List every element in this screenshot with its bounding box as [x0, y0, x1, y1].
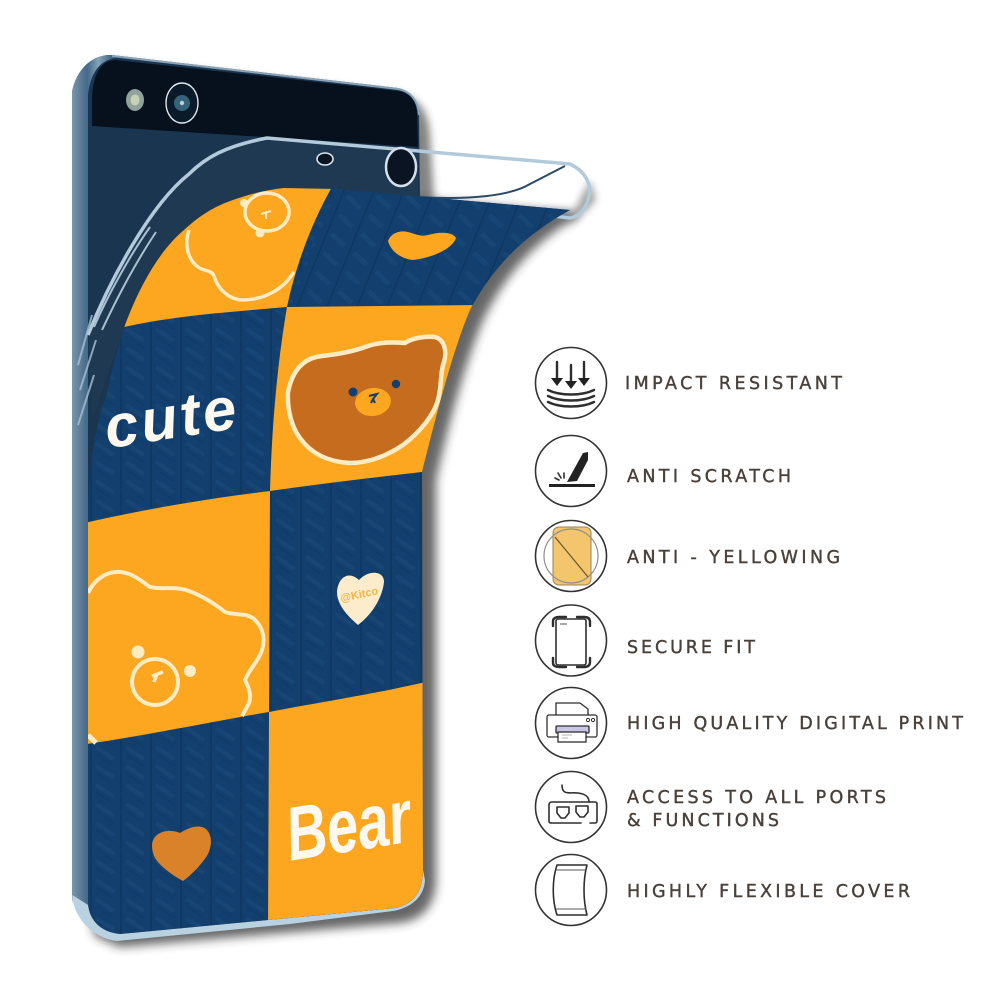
orange bottom right square [268, 681, 430, 930]
label: anti scratch: ANTI SCRATCH [627, 467, 791, 487]
label: ports: & FUNCTIONS [627, 811, 779, 831]
side button [94, 227, 156, 330]
phone metal edge [72, 55, 116, 905]
kitco heart [337, 573, 384, 625]
label: digital print: HIGH QUALITY DIGITAL PRINT [627, 714, 963, 734]
phone glass top band [92, 60, 418, 147]
feature: digital print [536, 688, 963, 758]
bear lettering: Bear [280, 773, 420, 878]
lower bear outline [88, 572, 263, 743]
phone shadow [110, 60, 434, 300]
orange second row square [270, 305, 480, 491]
feature list [536, 348, 963, 926]
feature: secure fit [536, 605, 755, 676]
label: flexible cover: HIGHLY FLEXIBLE COVER [627, 882, 910, 902]
phone camera [166, 83, 198, 123]
bear nose [369, 394, 377, 403]
label: impact resistant: IMPACT RESISTANT [625, 374, 842, 394]
knit top right square [286, 185, 580, 312]
label: secure fit: SECURE FIT [627, 638, 755, 658]
feature: flexible cover [536, 854, 910, 926]
feature: ports [536, 772, 886, 842]
brown bear face [288, 337, 445, 463]
label: anti yellowing: ANTI - YELLOWING [627, 548, 840, 568]
label: ports: ACCESS TO ALL PORTS [627, 788, 886, 808]
feature: anti yellowing [536, 520, 840, 592]
feature: anti scratch [536, 436, 791, 506]
case bottom rim [72, 870, 425, 941]
knit navy base [80, 180, 580, 940]
phone flash [126, 89, 144, 111]
side pleats [78, 315, 96, 425]
bear snout [355, 388, 391, 416]
bear head [288, 337, 445, 463]
printed artwork [80, 180, 580, 940]
icon: yellowing case [536, 520, 606, 592]
phone body [72, 55, 420, 905]
icon: scratch blade [536, 436, 606, 506]
clear case top band [78, 138, 590, 425]
icon: printer [536, 688, 606, 758]
camera cutout [386, 148, 416, 186]
phone back [72, 55, 434, 905]
case drop shadow [88, 188, 578, 947]
label: ports [627, 788, 886, 831]
small orange heart [388, 231, 456, 260]
phone and printed case [72, 55, 596, 947]
case outline right [88, 138, 590, 335]
top bear outline [187, 193, 294, 300]
icon: flexible sheet [536, 854, 606, 926]
band fill [88, 138, 418, 420]
kitco heart: @Kitco [339, 585, 380, 605]
bottom brown heart [152, 827, 211, 881]
orange top left square [124, 188, 331, 327]
tip shadow [420, 180, 596, 222]
small hole [317, 153, 333, 165]
icon: port connector [536, 772, 606, 842]
cute lettering: cute [100, 374, 244, 461]
icon: impact arrows [536, 348, 606, 418]
clear corner inner line [418, 166, 565, 198]
bear eyes [348, 388, 358, 396]
icon: secure phone [536, 605, 606, 676]
phone top edge highlight [112, 56, 419, 115]
orange third row square [80, 491, 270, 745]
feature: impact resistant [536, 348, 842, 418]
